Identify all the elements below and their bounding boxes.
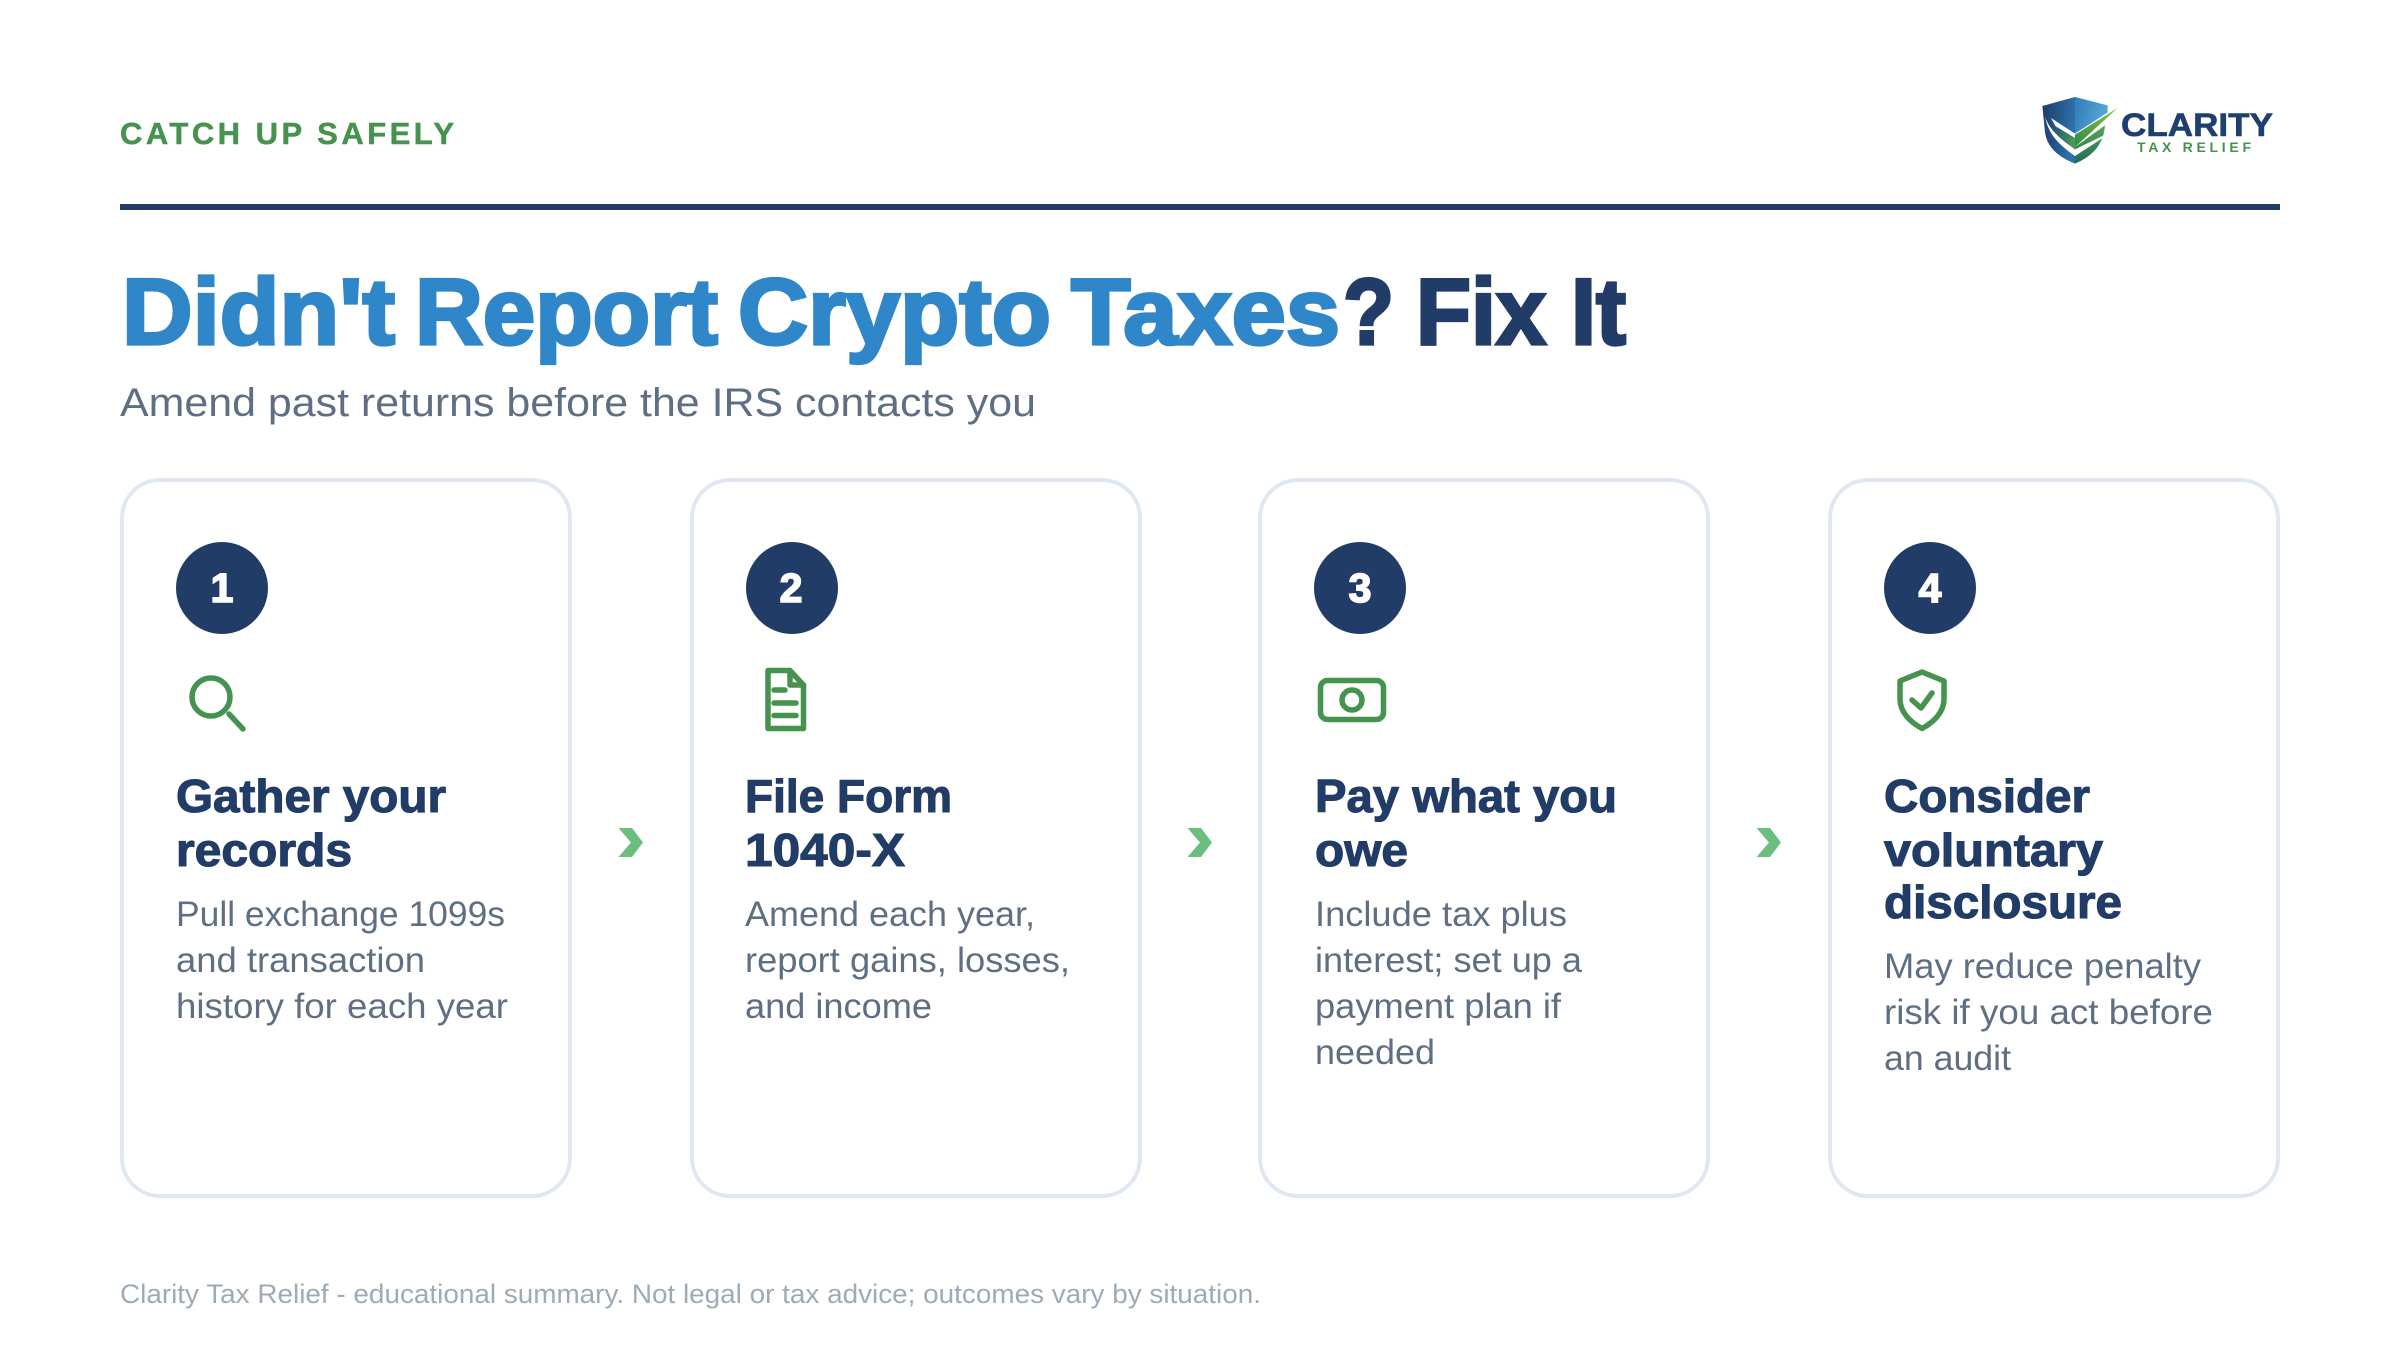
step 1 text: and transaction bbox=[176, 941, 425, 980]
arrow 2 bbox=[1188, 828, 1212, 857]
step 1 text bbox=[176, 895, 508, 1026]
step number 1 bbox=[176, 542, 268, 634]
arrow 1 bbox=[618, 828, 643, 857]
step 2 heading: File Form bbox=[745, 770, 952, 822]
step 4 text: risk if you act before bbox=[1884, 993, 2213, 1032]
step number 1: 1 bbox=[211, 565, 233, 611]
step number 4 bbox=[1884, 542, 1976, 634]
step 3 text: interest; set up a bbox=[1315, 941, 1583, 980]
step 1 text: history for each year bbox=[176, 987, 508, 1026]
step 2 heading: 1040-X bbox=[745, 824, 905, 876]
icon: magnifying glass bbox=[192, 678, 243, 729]
panel: step 4 bbox=[1830, 480, 2278, 1196]
step 1 heading: records bbox=[176, 824, 352, 876]
icon: shield check bbox=[1900, 672, 1944, 728]
header rule bbox=[120, 204, 2280, 210]
eyebrow: CATCH UP SAFELY bbox=[120, 116, 454, 151]
subtitle: Amend past returns before the IRS contacts you bbox=[120, 381, 1036, 425]
step 2 text: Amend each year, bbox=[745, 895, 1035, 934]
step 4 text bbox=[1884, 947, 2213, 1078]
step 3 text bbox=[1315, 895, 1583, 1072]
step 4 text: an audit bbox=[1884, 1039, 2011, 1078]
logo: Clarity Tax Relief bbox=[2042, 97, 2273, 164]
step 1 heading bbox=[176, 770, 446, 876]
step 3 heading bbox=[1315, 770, 1617, 876]
step 1 heading: Gather your bbox=[176, 770, 446, 822]
logo shield bbox=[2042, 97, 2118, 164]
step 4 heading: Consider bbox=[1884, 770, 2090, 822]
step 2 text bbox=[745, 895, 1070, 1026]
step 4 heading bbox=[1884, 770, 2122, 928]
step 2 heading bbox=[745, 770, 952, 876]
step 3 heading: owe bbox=[1315, 824, 1408, 876]
title: Taxes bbox=[1071, 259, 1340, 364]
step 3 text: needed bbox=[1315, 1033, 1435, 1072]
step number 3 bbox=[1314, 542, 1406, 634]
panel: step 1 bbox=[122, 480, 570, 1196]
step number 2 bbox=[746, 542, 838, 634]
logo tagline: TAX RELIEF bbox=[2137, 139, 2251, 155]
panel: step 3 bbox=[1260, 480, 1708, 1196]
title: Report bbox=[415, 259, 718, 364]
step 1 text: Pull exchange 1099s bbox=[176, 895, 505, 934]
title: Didn't bbox=[122, 259, 395, 364]
step number 3: 3 bbox=[1349, 565, 1371, 611]
title bbox=[122, 259, 1626, 364]
title: ? bbox=[1343, 259, 1394, 364]
step 3 heading: Pay what you bbox=[1315, 770, 1617, 822]
step 4 text: May reduce penalty bbox=[1884, 947, 2202, 986]
step 3 text: Include tax plus bbox=[1315, 895, 1567, 934]
step 2 text: report gains, losses, bbox=[745, 941, 1070, 980]
step 2 text: and income bbox=[745, 987, 932, 1026]
step 4 heading: disclosure bbox=[1884, 876, 2122, 928]
arrow 3 bbox=[1756, 828, 1781, 857]
title: Crypto bbox=[738, 259, 1051, 364]
icon: document bbox=[768, 670, 804, 728]
logo wordmark: CLARITY bbox=[2121, 107, 2273, 143]
step number 2: 2 bbox=[780, 565, 802, 611]
step 3 text: payment plan if bbox=[1315, 987, 1561, 1026]
step 4 heading: voluntary bbox=[1884, 824, 2103, 876]
footer disclaimer: Clarity Tax Relief - educational summary. Not legal or tax advice; outcomes vary by situation. bbox=[120, 1279, 1261, 1309]
panel: step 2 bbox=[692, 480, 1140, 1196]
step number 4: 4 bbox=[1919, 565, 1942, 611]
title: Fix It bbox=[1416, 259, 1626, 364]
icon: banknote bbox=[1320, 680, 1384, 720]
